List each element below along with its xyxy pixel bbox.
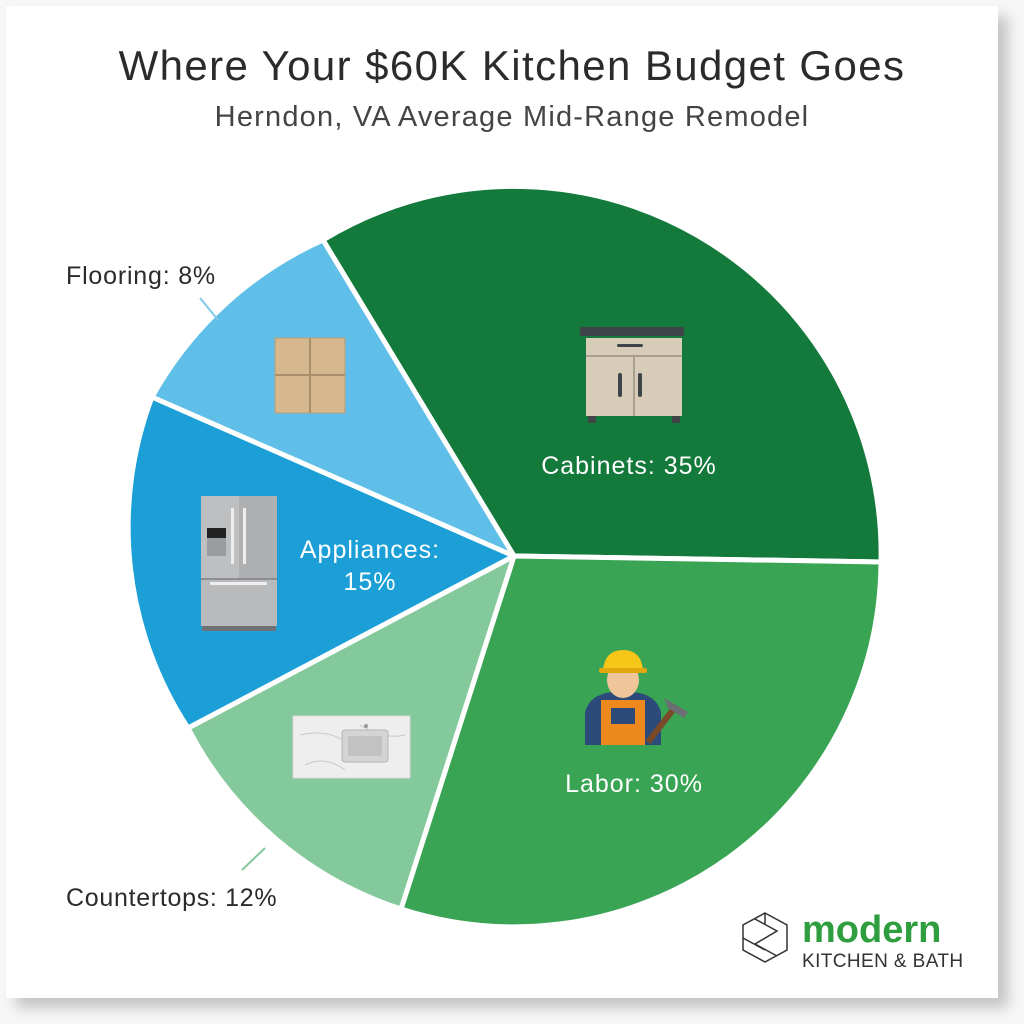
label: flooring with leader: Flooring: 8%: [66, 262, 216, 290]
logo: [743, 909, 964, 972]
title: Where Your $60K Kitchen Budget Goes: [119, 42, 905, 89]
label: flooring with leader: [66, 262, 218, 320]
text: 15%: [343, 568, 397, 596]
label: countertops with leader: [66, 848, 277, 912]
icon: refrigerator: [201, 496, 277, 631]
label: cabinets: Cabinets: 35%: [541, 452, 717, 480]
slice: cabinets: [323, 186, 881, 562]
label: appliances: Appliances:: [300, 536, 440, 564]
pie chart: [128, 186, 881, 927]
icon: floor tiles: [275, 338, 345, 413]
icon: countertop: [293, 716, 410, 778]
label: labor: Labor: 30%: [565, 770, 703, 798]
logo: modern: [802, 909, 941, 951]
icon: worker: [585, 650, 688, 745]
slice: flooring: [152, 240, 514, 556]
slice: labor: [401, 556, 881, 927]
label: countertops with leader: Countertops: 12%: [66, 884, 277, 912]
slice: appliances: [128, 397, 514, 728]
icon: cabinet: [580, 327, 684, 423]
logo: KITCHEN & BATH: [802, 951, 964, 972]
slice: countertops: [188, 556, 514, 909]
subtitle: Herndon, VA Average Mid-Range Remodel: [215, 101, 809, 133]
